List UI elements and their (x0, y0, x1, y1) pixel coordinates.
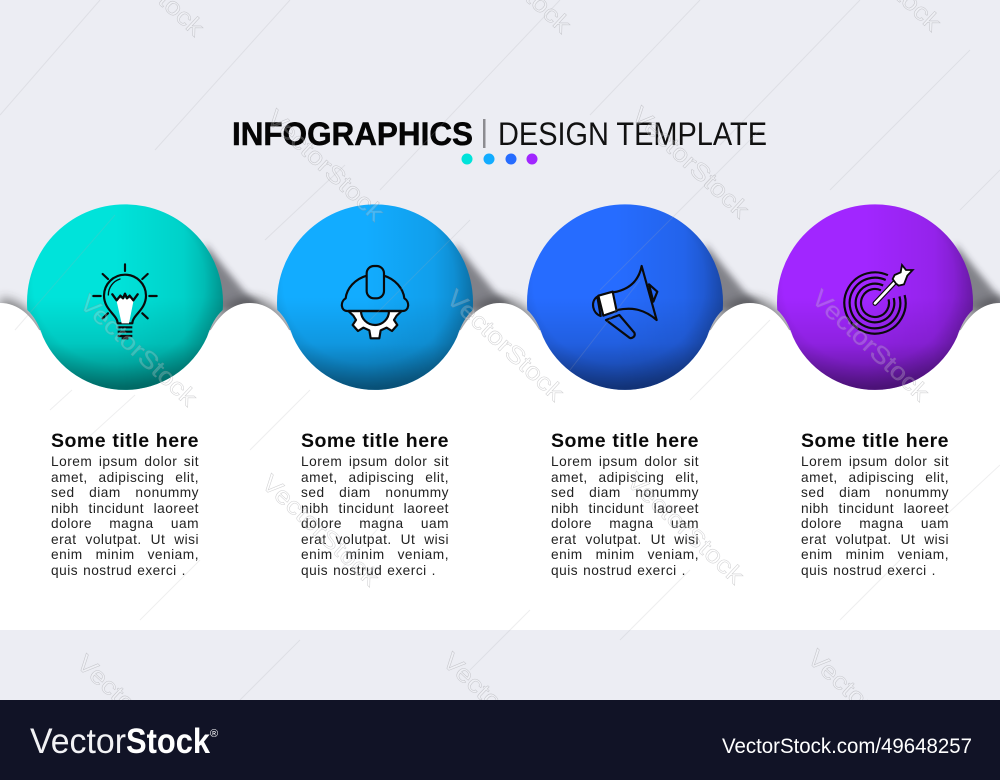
icon: helmet and gear (342, 266, 408, 338)
panel: column 4 text: dolore magna uam (801, 516, 949, 531)
watermark overlay: VectorStock (621, 468, 750, 590)
circle drop shadows (205, 243, 1000, 312)
icon: megaphone (593, 266, 657, 338)
panel: column 4 text: Lorem ipsum dolor sit (801, 454, 949, 469)
wave shadow (0, 292, 1000, 330)
panel: column 1 text: Lorem ipsum dolor sit (51, 454, 199, 469)
panel: column 3 text (551, 430, 699, 578)
panel: column 3 text: Some title here (551, 430, 699, 452)
panel: column 1 text: amet, adipiscing elit, (51, 470, 199, 485)
watermark overlay: VectorStock (441, 285, 570, 407)
circle 1 teal (27, 204, 223, 390)
panel: column 4 text: amet, adipiscing elit, (801, 470, 949, 485)
panel: column 2 text: Some title here (301, 430, 449, 452)
white wave panel (0, 303, 1000, 630)
footer image id: VectorStock.com/49648257 (722, 735, 972, 758)
panel: column 2 text: quis nostrud exerci . (301, 563, 436, 578)
circle 2 sky blue (277, 204, 473, 390)
panel: column 4 text: nibh tincidunt laoreet (801, 501, 949, 516)
footer logo: ® (210, 728, 218, 740)
icon: light bulb (93, 264, 157, 338)
panel: column 4 text: Some title here (801, 430, 949, 452)
panel: column 1 text: sed diam nonummy (51, 485, 199, 500)
title: DESIGN TEMPLATE (498, 116, 767, 152)
panel: column 2 text: sed diam nonummy (301, 485, 449, 500)
title dots (462, 154, 538, 164)
panel: column 1 text: nibh tincidunt laoreet (51, 501, 199, 516)
background and wave with circles (0, 119, 1000, 630)
circle 3 blue (527, 204, 723, 390)
footer logo: Stock (126, 722, 210, 761)
panel: column 3 text: enim minim veniam, (551, 547, 699, 562)
circle 4 purple (777, 204, 973, 390)
panel: column 1 text: erat volutpat. Ut wisi (51, 532, 199, 547)
panel: column 1 text: enim minim veniam, (51, 547, 199, 562)
watermark overlay: VectorStock (74, 290, 203, 412)
watermark overlay: VectorStock (626, 102, 755, 224)
panel: column 4 text: sed diam nonummy (801, 485, 949, 500)
panel: column 3 text: dolore magna uam (551, 516, 699, 531)
panel: column 2 text: Lorem ipsum dolor sit (301, 454, 449, 469)
panel: column 1 text: dolore magna uam (51, 516, 199, 531)
panel: column 2 text: dolore magna uam (301, 516, 449, 531)
panel: column 2 text (301, 430, 449, 578)
panel: column 3 text: nibh tincidunt laoreet (551, 501, 699, 516)
panel: column 1 text (51, 430, 199, 578)
panel: column 4 text: erat volutpat. Ut wisi (801, 532, 949, 547)
panel: column 2 text: amet, adipiscing elit, (301, 470, 449, 485)
icon: target with dart (837, 265, 913, 341)
watermark overlay: VectorStock (256, 470, 385, 592)
footer logo: Vector (30, 722, 126, 761)
panel: column 2 text: enim minim veniam, (301, 547, 449, 562)
title (232, 116, 767, 152)
panel: column 2 text: erat volutpat. Ut wisi (301, 532, 449, 547)
footer logo (30, 722, 218, 761)
panel: column 3 text: erat volutpat. Ut wisi (551, 532, 699, 547)
title: INFOGRAPHICS (232, 116, 473, 152)
panel: column 3 text: sed diam nonummy (551, 485, 699, 500)
panel: column 3 text: amet, adipiscing elit, (551, 470, 699, 485)
panel: column 3 text: quis nostrud exerci . (551, 563, 686, 578)
panel: column 1 text: quis nostrud exerci . (51, 563, 186, 578)
watermark overlay: VectorStock (806, 285, 935, 407)
panel: column 2 text: nibh tincidunt laoreet (301, 501, 449, 516)
panel: column 1 text: Some title here (51, 430, 199, 452)
panel: column 4 text: quis nostrud exerci . (801, 563, 936, 578)
panel: column 4 text (801, 430, 949, 578)
panel: column 3 text: Lorem ipsum dolor sit (551, 454, 699, 469)
panel: column 4 text: enim minim veniam, (801, 547, 949, 562)
watermark overlay: VectorStock (261, 105, 390, 227)
